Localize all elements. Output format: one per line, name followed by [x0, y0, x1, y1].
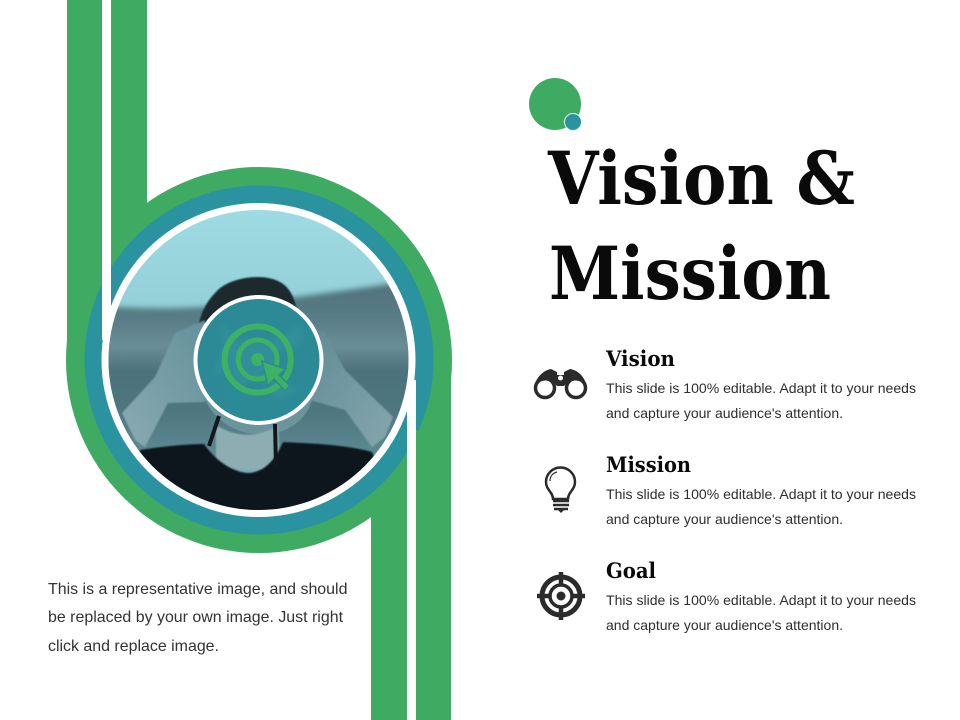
icon: crosshair target [537, 572, 585, 620]
center target badge [196, 297, 322, 423]
item: vision: and capture your audience's attention. [606, 405, 843, 421]
item: goal: Goal [606, 558, 656, 583]
item: mission: and capture your audience's attention. [606, 511, 843, 527]
left arm [122, 320, 205, 447]
right arm [312, 330, 394, 447]
representative image caption: be replaced by your own image. Just right [48, 609, 344, 626]
item: vision: This slide is 100% editable. Adapt it to your needs [606, 380, 916, 396]
photo: person with binoculars [100, 205, 420, 515]
icon: target with cursor [225, 326, 291, 392]
item: goal [537, 558, 916, 633]
straps [209, 416, 276, 468]
title [547, 136, 855, 317]
title: Mission [549, 231, 831, 317]
representative image caption: click and replace image. [48, 638, 219, 655]
item: goal: This slide is 100% editable. Adapt it to your needs [606, 592, 916, 608]
hair [198, 276, 298, 324]
binocular bodies [184, 345, 330, 385]
item: vision [534, 346, 916, 421]
representative image caption [48, 581, 347, 655]
neck [216, 425, 280, 470]
title accent dots [529, 78, 582, 130]
face [205, 397, 312, 434]
icon: binoculars [534, 369, 587, 398]
representative image caption: This is a representative image, and should [48, 581, 347, 598]
item: mission: This slide is 100% editable. Adapt it to your needs [606, 486, 916, 502]
item: mission: Mission [606, 452, 691, 477]
title: Vision & [547, 136, 855, 222]
icon: light bulb [546, 468, 575, 513]
item: goal: and capture your audience's attention. [606, 617, 843, 633]
item: vision: Vision [605, 346, 675, 371]
shirt [139, 441, 374, 510]
decorative ring graphic with stripes [66, 0, 452, 720]
item: mission [546, 452, 916, 527]
